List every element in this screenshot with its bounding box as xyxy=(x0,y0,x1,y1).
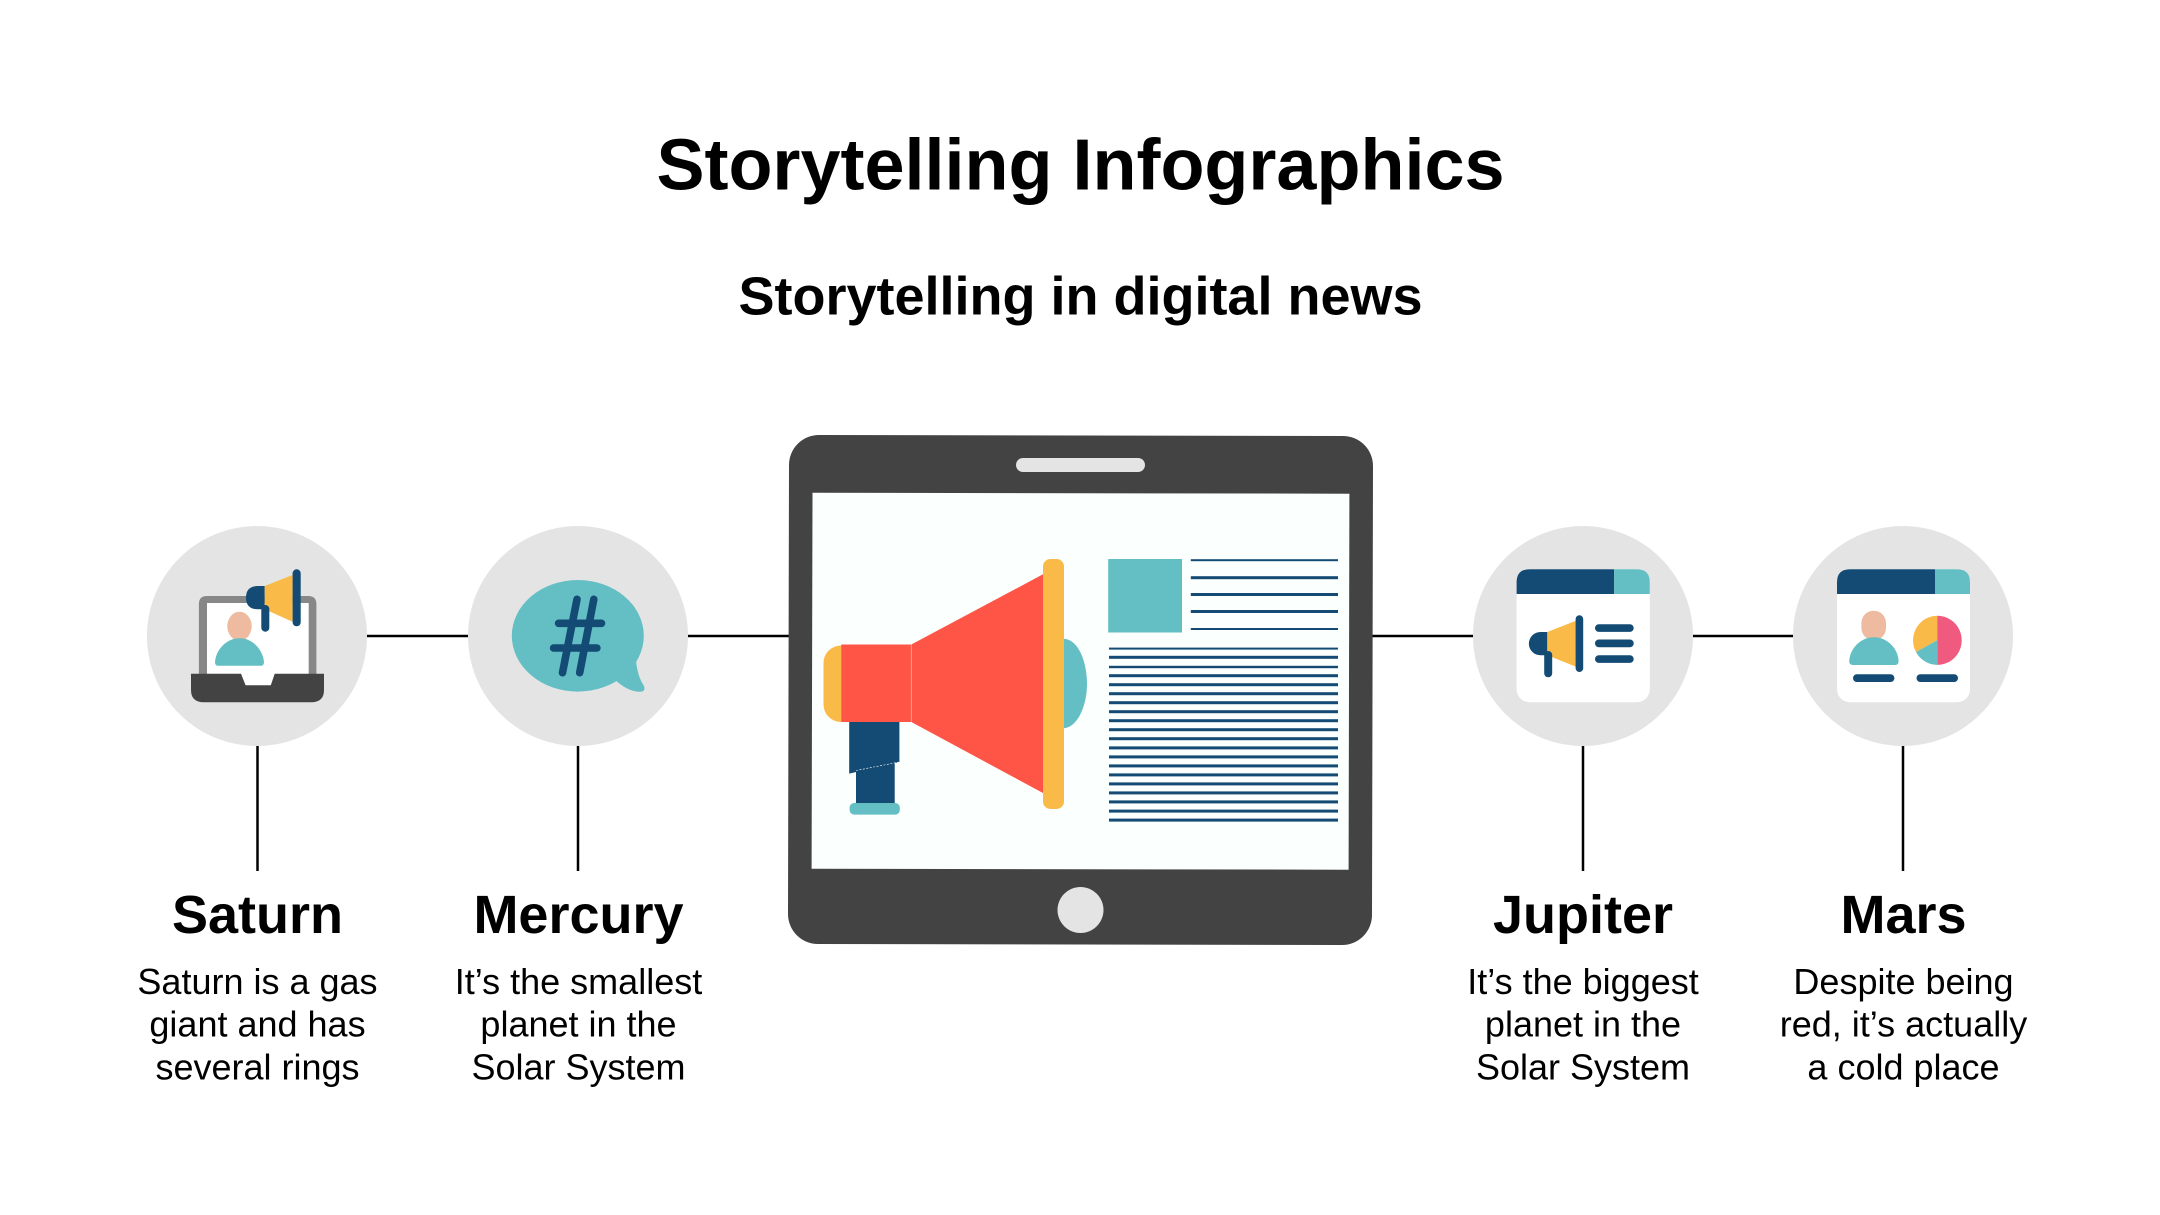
text block: Mercury: It’s the smallest xyxy=(455,961,702,1002)
text block: Saturn xyxy=(137,885,378,1088)
text block: Mars: a cold place xyxy=(1807,1046,2000,1088)
text block: Mars: red, it’s actually xyxy=(1780,1004,2027,1044)
text block: Saturn: several rings xyxy=(155,1046,360,1088)
browser card xyxy=(1837,569,1970,702)
speech bubble xyxy=(512,580,644,692)
megaphone xyxy=(246,569,301,632)
news article xyxy=(1108,559,1338,822)
laptop xyxy=(191,596,324,702)
text block: Saturn: giant and has xyxy=(149,1004,366,1044)
tablet speaker xyxy=(1016,458,1145,472)
megaphone xyxy=(824,559,1087,815)
megaphone xyxy=(1529,615,1583,677)
text block: Mars xyxy=(1780,885,2027,1088)
person xyxy=(215,612,264,666)
text block: Saturn: Saturn xyxy=(172,885,343,945)
text block: Saturn: Saturn is a gas xyxy=(137,961,378,1002)
text block: Mercury: planet in the xyxy=(480,1004,677,1044)
hashtag xyxy=(554,599,602,673)
text block: Mercury: Mercury xyxy=(473,885,684,945)
tablet screen xyxy=(812,493,1349,870)
text block: Mars: Despite being xyxy=(1793,961,2014,1002)
panel: Jupiter icon xyxy=(1473,526,1693,746)
tablet home button xyxy=(1058,887,1104,933)
browser card xyxy=(1517,569,1650,702)
panel: Mars icon xyxy=(1793,526,2013,746)
label bars xyxy=(1853,674,1958,682)
pie chart xyxy=(1913,616,1962,665)
text block: Mercury xyxy=(455,885,702,1088)
person xyxy=(1849,611,1899,665)
text block: Jupiter xyxy=(1467,885,1699,1088)
text block: Jupiter: It’s the biggest xyxy=(1467,961,1699,1002)
text block: Jupiter: Solar System xyxy=(1476,1046,1690,1088)
panel: Mercury icon xyxy=(468,526,688,746)
text block: Mercury: Solar System xyxy=(471,1046,686,1088)
panel: Saturn icon xyxy=(147,526,367,746)
icon: tablet with megaphone and news xyxy=(788,435,1373,945)
text lines xyxy=(1595,624,1634,663)
tablet body xyxy=(788,435,1373,945)
text block: Mars: Mars xyxy=(1840,885,1967,945)
subtitle: Storytelling in digital news xyxy=(738,266,1423,326)
title: Storytelling Infographics xyxy=(656,126,1505,206)
text block: Jupiter: planet in the xyxy=(1485,1004,1681,1044)
text block: Jupiter: Jupiter xyxy=(1493,885,1673,945)
